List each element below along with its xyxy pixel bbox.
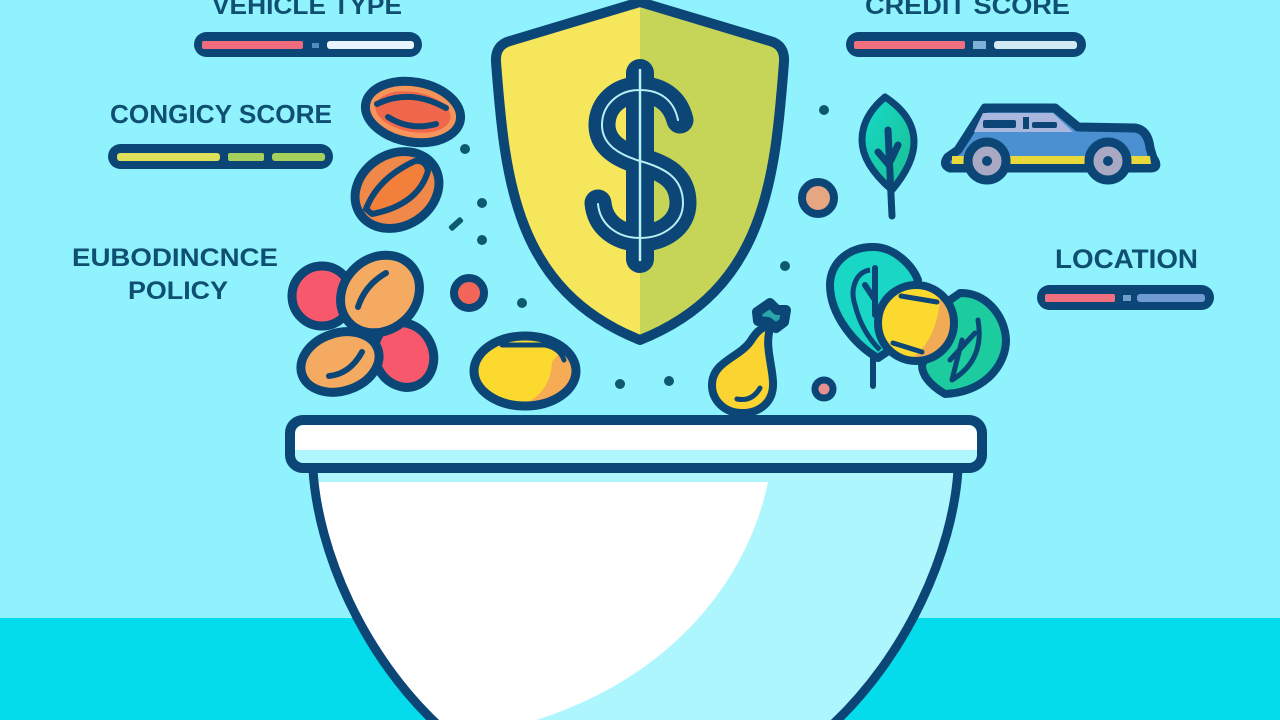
slider bar: vehicle type	[194, 32, 422, 57]
floor band	[0, 618, 1280, 720]
label: eubodincnce policy	[72, 244, 278, 305]
bowl body	[313, 470, 958, 720]
car roof windows band	[974, 113, 1073, 132]
leafy greens with yellow ball	[830, 247, 1006, 394]
label: eubodincnce policy: EUBODINCNCE	[72, 244, 278, 272]
mixing bowl	[290, 420, 982, 720]
red petal right	[364, 313, 444, 397]
shield left half	[496, 3, 640, 340]
car icon	[945, 108, 1156, 180]
car sill	[952, 156, 1151, 164]
slider bar: congicy score	[108, 144, 333, 169]
bowl outline	[313, 470, 958, 720]
factor: vehicle type	[194, 0, 422, 57]
slider bar: credit score	[846, 32, 1086, 57]
ring dot: peach	[802, 182, 834, 214]
front wheel	[968, 142, 1006, 180]
back right leaf	[922, 293, 1006, 394]
car body	[945, 108, 1156, 168]
yellow oval fruit	[474, 336, 578, 408]
four petal fruit cluster	[292, 239, 444, 402]
ring dot: red	[454, 278, 484, 308]
shield right half	[640, 3, 784, 340]
label: location: LOCATION	[1055, 244, 1198, 274]
orange petal bottom	[293, 322, 387, 402]
shield outline	[496, 2, 784, 340]
orange petal top	[325, 239, 435, 349]
bean: top red	[361, 74, 465, 150]
bowl rim	[290, 420, 982, 468]
slider bar: location	[1037, 285, 1214, 310]
left leaf	[830, 247, 918, 358]
rear wheel	[1089, 142, 1127, 180]
scattered crumbs	[448, 105, 829, 389]
yellow ball	[878, 285, 960, 365]
factor: congicy score	[108, 99, 333, 169]
leaf with stem	[862, 97, 914, 216]
bowl white highlight	[317, 482, 768, 720]
factor: location	[1037, 244, 1214, 310]
pear with star top	[712, 303, 786, 413]
bean: orange seed	[341, 136, 453, 244]
ring dot: small pink	[815, 380, 833, 398]
factor: credit score	[846, 0, 1086, 57]
label: eubodincnce policy: POLICY	[128, 277, 228, 305]
shield with dollar sign	[496, 2, 784, 340]
dollar sign	[598, 70, 683, 260]
red petal left	[292, 266, 352, 326]
label: congicy score: CONGICY SCORE	[110, 99, 332, 129]
